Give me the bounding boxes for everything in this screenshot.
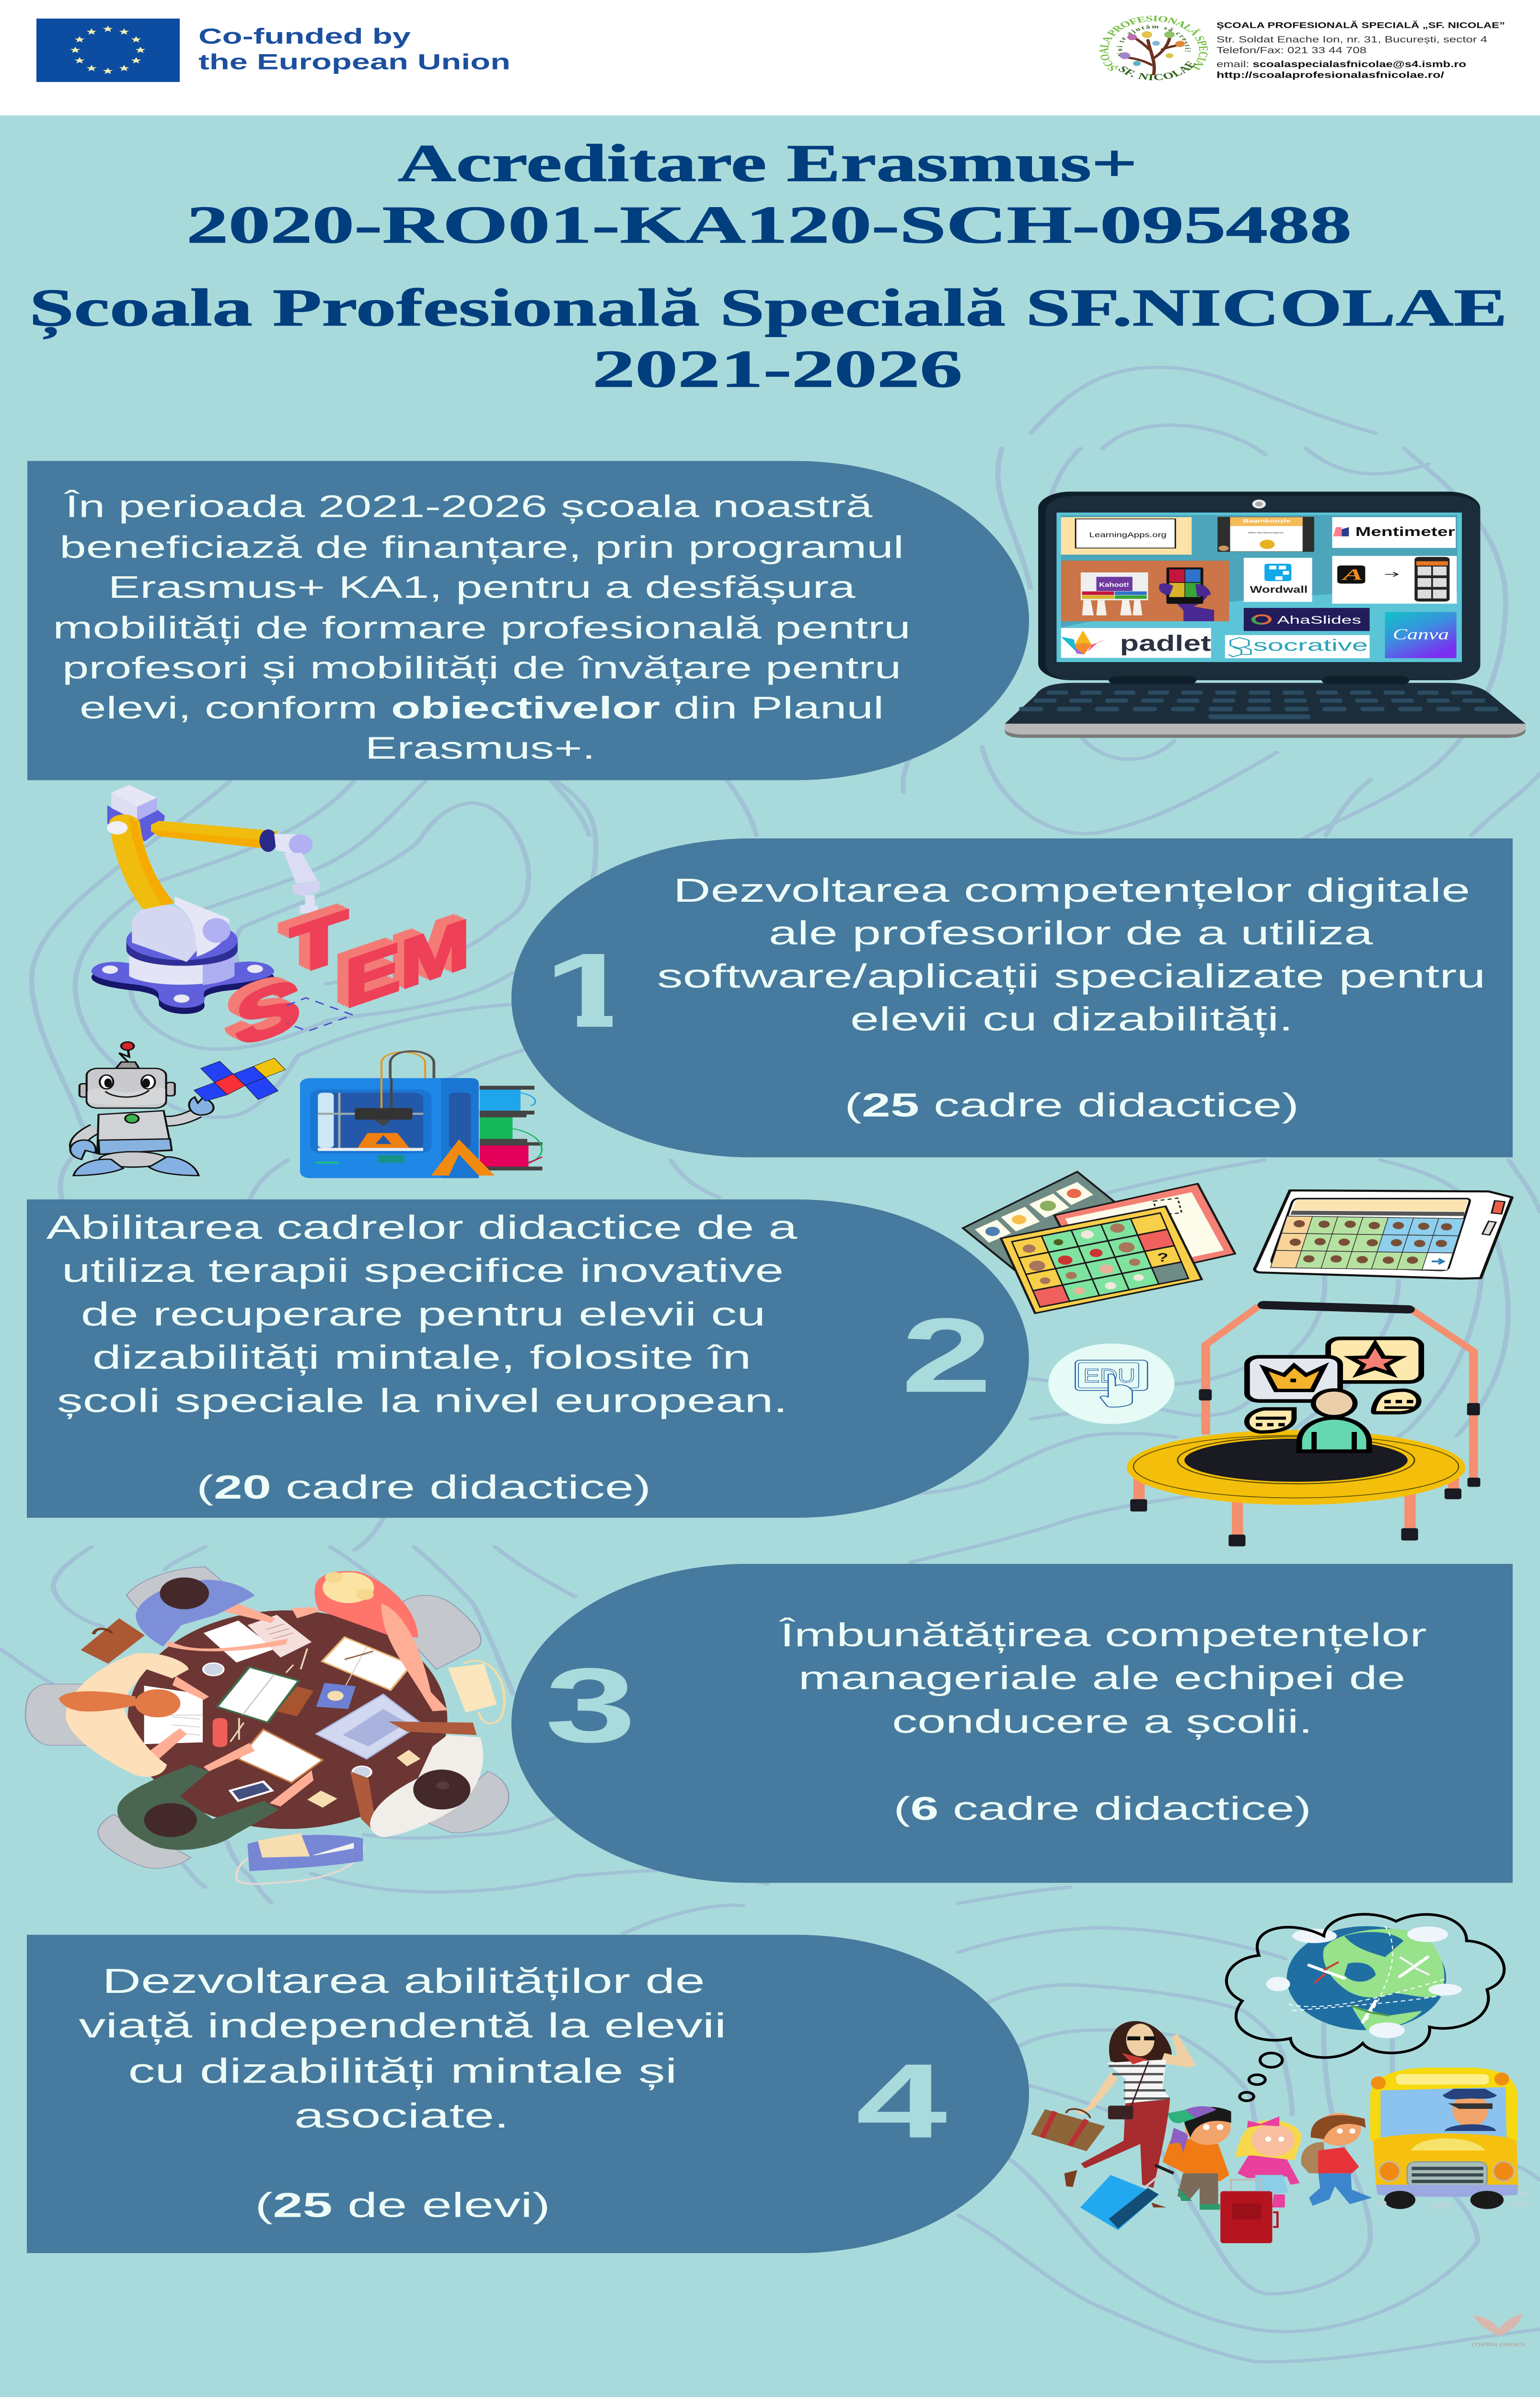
text: objective 1: elevii cu dizabilități.: [850, 1001, 1293, 1038]
title: 2021-2026: [592, 340, 962, 398]
icon: tablet with symbols: [1255, 1190, 1512, 1279]
title: 2020-RO01-KA120-SCH-095488: [186, 196, 1352, 254]
illustration: STEM robots and 3D printer: [70, 785, 543, 1178]
text: objective 4: cu dizabilități mintale și: [128, 2051, 677, 2090]
tile: Socrative: [1225, 635, 1370, 658]
tile: LearningApps: LearningApps.org: [1089, 531, 1167, 539]
icon: communication boards: [963, 1172, 1235, 1313]
icon: robotic arm: [92, 785, 320, 1014]
title: [29, 134, 1507, 398]
text: school contact details: email: scoalaspecialasfnicolae@s4.ismb.ro: [1216, 59, 1466, 69]
text: objective 2: școli speciale la nivel european.: [57, 1382, 787, 1420]
text: objective 1: Dezvoltarea competențelor digitale: [673, 872, 1470, 909]
tile: Wordwall: Wordwall: [1250, 584, 1308, 595]
icon: EDU touch circle: EDU: [1083, 1365, 1135, 1386]
watermark: butterfly logo: cristina cotescu: [1471, 2341, 1525, 2348]
person: blue shirt: [136, 1577, 288, 1652]
tile: Baamboozle: [1217, 517, 1314, 552]
title: Școala Profesională Specială SF.NICOLAE: [29, 279, 1507, 339]
text: objective 2: utiliza terapii specifice inovative: [62, 1252, 784, 1290]
panel: objective 2: [27, 1199, 1029, 1518]
number 3: 3: [545, 1646, 636, 1764]
table: [127, 1610, 447, 1829]
icon: 3D printer: [300, 1051, 543, 1178]
icon: thought cloud: [1227, 1914, 1504, 2101]
icon: red suitcase: [1220, 2180, 1277, 2243]
header band: [0, 0, 1540, 116]
text: school contact details: [1216, 21, 1505, 80]
text: intro paragraph: beneficiază de finanțare, prin programul: [59, 530, 904, 564]
tile: Padlet: padlet: [1120, 631, 1211, 656]
text: intro paragraph: mobilități de formare profesională pentru: [53, 610, 911, 645]
text: intro paragraph: În perioada 2021-2026 școala noastră: [64, 489, 872, 524]
text: objective 4: (25 de elevi): [255, 2186, 550, 2224]
tile: Wordwall: [1244, 558, 1312, 602]
tile: LearningApps: [1061, 517, 1192, 555]
tile: Socrative: socrative: [1253, 637, 1368, 655]
text: objective 1: [657, 872, 1485, 1124]
icon: EDU touch circle: [1048, 1343, 1174, 1424]
number 1: 1: [544, 931, 635, 1049]
illustration: team around a table: [25, 1567, 509, 1884]
text: co-funded by the European Union: the European Union: [198, 50, 510, 74]
text: school contact details: http://scoalaprofesionalasfnicolae.ro/: [1216, 70, 1445, 80]
icon: trampoline with child and bubbles: [1127, 1305, 1480, 1547]
text: school contact details: Telefon/Fax: 021 33 44 708: [1216, 46, 1366, 55]
number 4: 4: [856, 2041, 948, 2160]
text: objective 3: manageriale ale echipei de: [799, 1659, 1405, 1696]
icon: dashed square: [287, 998, 353, 1031]
panel: objective 3: [511, 1564, 1513, 1883]
logo: school emblem: SF. NICOLAE: [1115, 59, 1199, 82]
icon: laptop with education apps: [1005, 491, 1526, 738]
number 2: 2: [901, 1296, 992, 1414]
title: Acreditare Erasmus+: [398, 134, 1137, 193]
chairs: [25, 1567, 509, 1868]
icon: cream pouch: [448, 1661, 504, 1723]
text: co-funded by the European Union: [198, 24, 510, 74]
text: school contact details: ȘCOALA PROFESIONALĂ SPECIALĂ „SF. NICOLAE”: [1216, 21, 1505, 30]
person: cream top, red hair: [58, 1653, 209, 1777]
tile: Padlet: [1061, 628, 1211, 658]
text: intro paragraph: Erasmus+.: [365, 731, 595, 765]
tile: Actionbound: A: [1341, 566, 1363, 583]
text: objective 3: [779, 1617, 1427, 1827]
tile: Baamboozle: Baamboozle: [1243, 518, 1291, 524]
icon: brown suitcase: [1031, 2109, 1105, 2151]
text: objective 2: Abilitarea cadrelor didactice de a: [46, 1209, 798, 1246]
text: objective 2: dizabilități mintale, folosite în: [93, 1339, 751, 1376]
icon: communication boards: ?: [1157, 1251, 1169, 1264]
text: objective 3: conducere a școlii.: [892, 1703, 1313, 1740]
tile: Canva: [1385, 612, 1457, 658]
tile: Kahoot: Kahoot!: [1099, 582, 1129, 588]
icon: woman traveller: [1064, 2021, 1196, 2208]
icon: cube net: [194, 1058, 285, 1101]
illustration: communication boards and trampoline: [963, 1172, 1512, 1547]
tile: Mentimeter: Mentimeter: [1355, 524, 1455, 539]
panel: objective 4: [27, 1935, 1029, 2253]
text: objective 3: Îmbunătățirea competențelor: [779, 1617, 1427, 1653]
items on table: [144, 1615, 422, 1808]
tile: Actionbound: [1332, 556, 1457, 604]
icon: school bus: [1370, 2068, 1529, 2209]
tile: AhaSlides: [1244, 608, 1370, 631]
text: objective 2: (20 cadre didactice): [197, 1469, 651, 1506]
tile: Kahoot: [1061, 561, 1229, 621]
text: school contact details: Str. Soldat Enache Ion, nr. 31, București, sector 4: [1216, 35, 1487, 44]
text: intro paragraph: Erasmus+ KA1, pentru a desfășura: [108, 570, 856, 605]
icon: STEM letters: S: [235, 963, 301, 1063]
icon: STEM letters: [235, 896, 470, 1063]
text: objective 2: de recuperare pentru elevii cu: [81, 1296, 765, 1333]
text: intro paragraph: elevi, conform obiectivelor din Planul: [80, 690, 884, 725]
text: objective 1: (25 cadre didactice): [845, 1087, 1299, 1124]
tile: Mentimeter: [1332, 517, 1456, 548]
illustration: school trip: [1031, 1914, 1529, 2348]
text: objective 4: Dezvoltarea abilităților de: [102, 1962, 705, 2001]
text: objective 4: asociate.: [294, 2096, 509, 2135]
text: objective 4: [79, 1962, 727, 2224]
icon: girl: [1235, 2117, 1302, 2208]
text: objective 1: ale profesorilor de a utiliza: [769, 915, 1373, 952]
icon: boy with backpack: [1301, 2113, 1372, 2206]
text: objective 4: viață independentă la elevii: [79, 2006, 727, 2045]
person: white shirt: [350, 1722, 483, 1837]
tile: Baamboozle: Make educational games.: [1248, 531, 1284, 534]
watermark: butterfly logo: [1471, 2314, 1525, 2348]
panel: intro: [27, 461, 1029, 780]
icon: STEM letters: T: [290, 896, 348, 990]
logo: school emblem: Noi te ajutăm să crești!: [1115, 24, 1192, 57]
person: coral top: [291, 1571, 448, 1711]
text: objective 1: software/aplicații specializate pentru: [657, 958, 1485, 995]
icon: globe with planes: [1266, 1926, 1462, 2038]
tile: AhaSlides: AhaSlides: [1277, 614, 1361, 626]
icon: blue suitcase: [1080, 2165, 1174, 2230]
text: objective 2: [46, 1209, 798, 1506]
person: green jumper: [117, 1743, 313, 1850]
panel: objective 1: [511, 838, 1513, 1157]
text: objective 3: (6 cadre didactice): [893, 1790, 1311, 1827]
icon: EU flag: [36, 19, 180, 82]
text: co-funded by the European Union: Co-funded by: [198, 24, 411, 48]
icon: STEM letters: EM: [345, 904, 470, 1023]
text: intro paragraph: [53, 489, 911, 765]
icon: brown briefcase: [81, 1618, 145, 1664]
text: intro paragraph: profesori și mobilități de învățare pentru: [62, 651, 901, 685]
icon: child with cap: [1162, 2106, 1231, 2210]
icon: blue pencil case: [236, 1833, 363, 1884]
tile: Canva: Canva: [1393, 626, 1449, 643]
icon: cartoon robot: [70, 1042, 214, 1175]
